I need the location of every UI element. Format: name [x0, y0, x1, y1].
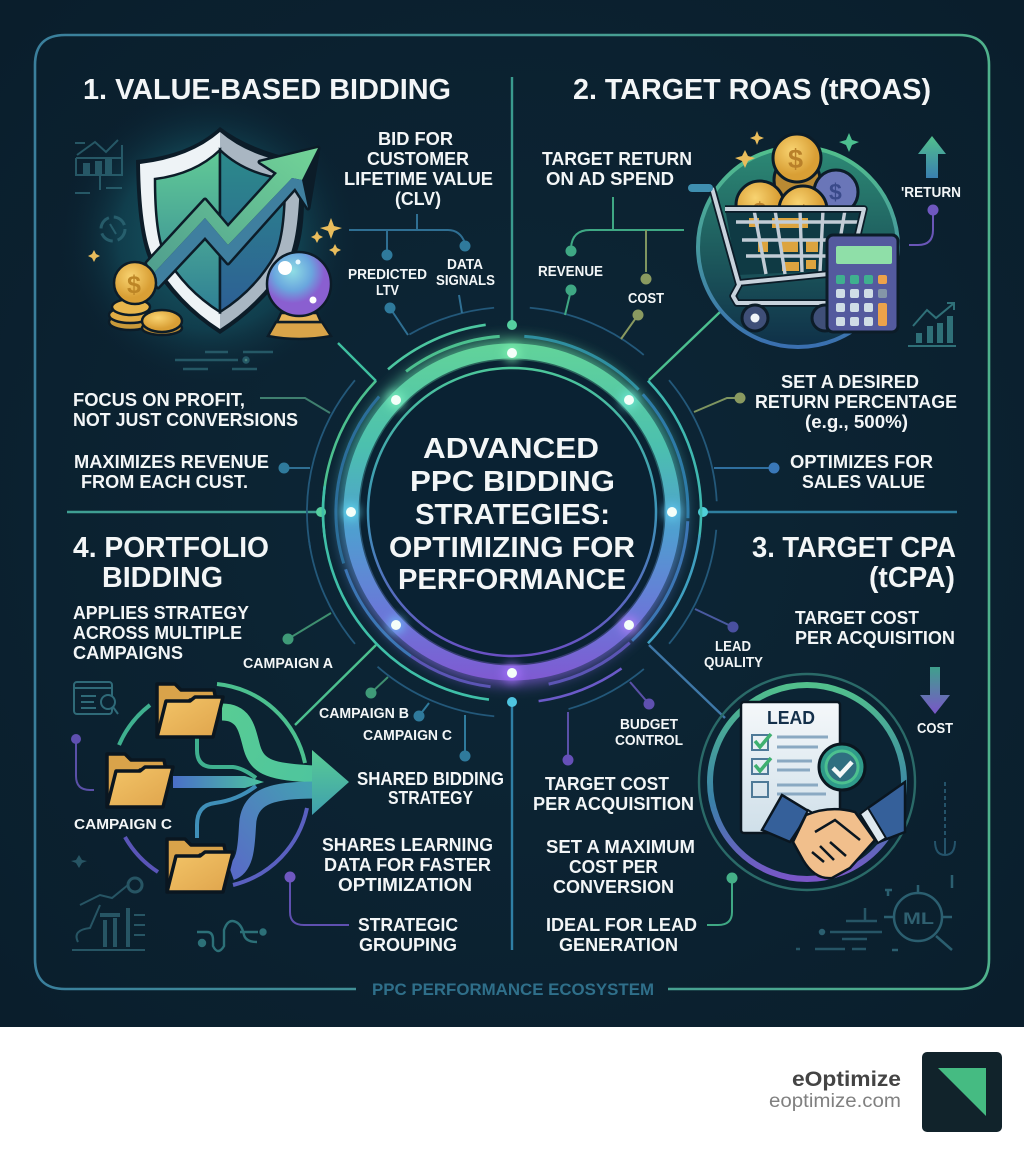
label: campaign C upper: CAMPAIGN C	[363, 728, 453, 744]
text: set a maximum cost	[546, 837, 695, 897]
heading 2: 2. TARGET ROAS (tROAS)	[573, 74, 931, 106]
icon: faint hook line	[935, 782, 955, 855]
heading 4	[73, 532, 269, 594]
label: predicted LTV	[348, 267, 427, 299]
connector: strategic grouping	[284, 872, 349, 925]
heading 1: 1. VALUE-BASED BIDDING	[83, 74, 451, 106]
central hub rings	[223, 223, 801, 801]
text: bid for customer lifetime value: (CLV)	[395, 189, 441, 209]
hub glow dots	[343, 345, 680, 682]
text: target return on ad spend: ON AD SPEND	[546, 169, 674, 189]
icon: lead form with handshake	[699, 674, 915, 890]
connector: lead quality	[695, 609, 738, 632]
icon: return arrow up	[918, 136, 946, 178]
icon: faint cycle	[101, 217, 125, 241]
icon: shield with rising arrow, coins and crystal ball	[58, 86, 362, 390]
central title: STRATEGIES:	[415, 499, 610, 531]
text: target return on ad spend	[542, 149, 692, 189]
text: ML: ML	[903, 909, 934, 928]
label: lead quality	[704, 639, 763, 671]
text: focus on profit: NOT JUST CONVERSIONS	[73, 410, 298, 430]
connector: campaign B	[366, 677, 429, 722]
connector: left divider	[67, 507, 326, 517]
label: predicted LTV: PREDICTED	[348, 267, 427, 283]
icon: shopping cart with coins and calculator	[688, 131, 898, 347]
connector: right divider	[698, 507, 957, 517]
connector: bottom divider	[507, 697, 517, 950]
text: target cost per acquisition center	[533, 774, 694, 814]
text: set a maximum cost: CONVERSION	[553, 877, 674, 897]
text: optimizes for sales value: OPTIMIZES FOR	[790, 452, 933, 472]
text: target cost per acquisition right: TARGET COST	[795, 608, 919, 628]
connector: left purple	[71, 734, 94, 790]
text: set a desired return percentage: (e.g., 500%)	[805, 412, 908, 432]
text: shared bidding strategy	[357, 769, 504, 808]
text: focus on profit: FOCUS ON PROFIT,	[73, 390, 245, 410]
text: shares learning data: OPTIMIZATION	[338, 875, 472, 895]
icon: shield with rising arrow, coins and crystal ball: $	[127, 271, 141, 299]
label: data signals: DATA	[447, 257, 483, 273]
connector: desired return	[694, 392, 746, 412]
text: strategic grouping: GROUPING	[359, 935, 457, 955]
icon: faint search window	[74, 682, 118, 714]
central title: OPTIMIZING FOR	[389, 532, 635, 564]
connector: return	[909, 204, 938, 245]
icon: faint growth chart	[908, 303, 956, 346]
label: predicted LTV: LTV	[376, 283, 399, 299]
icon: shopping cart with coins and calculator: $	[797, 201, 811, 228]
connector: budget control	[630, 682, 654, 710]
central title: PERFORMANCE	[398, 564, 626, 596]
icon: faint analytics cluster	[71, 855, 145, 950]
text: maximizes revenue: FROM EACH CUST.	[81, 472, 248, 492]
text: ideal for lead generation	[546, 915, 697, 955]
text: applies strategy	[73, 603, 249, 663]
text: ideal for lead generation: GENERATION	[559, 935, 678, 955]
connector: focus on profit	[260, 398, 330, 413]
text: shares learning data	[322, 835, 493, 895]
central title: ADVANCED	[423, 433, 599, 465]
label: campaign A: CAMPAIGN A	[243, 656, 334, 672]
text: set a desired return percentage: RETURN PERCENTAGE	[755, 392, 957, 412]
heading 3	[752, 532, 956, 594]
label: budget control: BUDGET	[620, 717, 678, 733]
text: set a desired return percentage: SET A DESIRED	[781, 372, 919, 392]
text: target return on ad spend: TARGET RETURN	[542, 149, 692, 169]
heading 3: (tCPA)	[869, 562, 955, 594]
text: applies strategy: APPLIES STRATEGY	[73, 603, 249, 623]
connector: maximizes revenue	[278, 462, 310, 474]
heading 4: BIDDING	[102, 562, 223, 594]
connector: top divider	[507, 77, 517, 330]
central title	[389, 433, 635, 596]
text: applies strategy: CAMPAIGNS	[73, 643, 183, 663]
text: strategic grouping	[358, 915, 458, 955]
label: cost: COST	[917, 721, 953, 737]
connector: corner lines from hub	[295, 312, 725, 725]
label: return: 'RETURN	[901, 185, 961, 201]
text: optimizes for sales value	[790, 452, 933, 492]
label: lead quality: QUALITY	[704, 655, 763, 671]
text: ideal for lead generation: IDEAL FOR LEAD	[546, 915, 697, 935]
text: target cost per acquisition right	[795, 608, 955, 648]
text: bid for customer lifetime value: CUSTOMER	[367, 149, 469, 169]
connector: sales value	[714, 462, 780, 474]
text: maximizes revenue: MAXIMIZES REVENUE	[74, 452, 269, 472]
footer caption: PPC PERFORMANCE ECOSYSTEM	[372, 981, 654, 999]
icon: faint signal wave	[197, 921, 266, 951]
connector: campaign C	[460, 715, 470, 762]
text: shared bidding strategy: SHARED BIDDING	[357, 769, 504, 789]
label: budget control	[615, 717, 683, 749]
text: shared bidding strategy: STRATEGY	[388, 788, 473, 808]
connector tree: ROAS	[565, 197, 684, 339]
label: data signals: SIGNALS	[436, 273, 495, 289]
icon: lead form with handshake: LEAD	[767, 708, 815, 728]
connector: cost per acquisition	[562, 712, 574, 766]
text: set a maximum cost: SET A MAXIMUM	[546, 837, 695, 857]
text: optimizes for sales value: SALES VALUE	[802, 472, 925, 492]
icon: faint ML magnifier	[796, 875, 952, 950]
label: cost: COST	[628, 291, 664, 307]
label: budget control: CONTROL	[615, 733, 683, 749]
text: maximizes revenue	[74, 452, 269, 492]
brand url: eoptimize.com	[769, 1091, 901, 1112]
text: shares learning data: SHARES LEARNING	[322, 835, 493, 855]
central title: PPC BIDDING	[410, 466, 615, 498]
brand name: eOptimize	[792, 1067, 901, 1091]
text: bid for customer lifetime value: BID FOR	[378, 129, 453, 149]
footer band	[0, 1027, 1024, 1154]
icon: shopping cart with coins and calculator: $	[788, 144, 803, 174]
text: applies strategy: ACROSS MULTIPLE	[73, 623, 242, 643]
icon: faint chart	[75, 140, 122, 193]
decorative data lines	[175, 352, 273, 369]
text: target cost per acquisition center: TARGET COST	[545, 774, 669, 794]
label: campaign B: CAMPAIGN B	[319, 706, 409, 722]
text: set a desired return percentage	[755, 372, 957, 432]
text: set a maximum cost: COST PER	[569, 857, 658, 877]
label: campaign C lower: CAMPAIGN C	[74, 817, 173, 833]
icon: shopping cart with coins and calculator: $	[829, 179, 842, 205]
icon: portfolio folders merging into arrow	[107, 684, 349, 892]
label: lead quality: LEAD	[715, 639, 751, 655]
label: data signals	[436, 257, 495, 289]
text: strategic grouping: STRATEGIC	[358, 915, 458, 935]
text: target cost per acquisition center: PER ACQUISITION	[533, 794, 694, 814]
label: revenue: REVENUE	[538, 264, 603, 280]
panel frame	[35, 35, 989, 989]
heading 3: 3. TARGET CPA	[752, 532, 956, 564]
text: target cost per acquisition right: PER ACQUISITION	[795, 628, 955, 648]
logo	[922, 1052, 1002, 1132]
icon: cost arrow down	[920, 667, 950, 714]
text: focus on profit	[73, 390, 298, 430]
text: bid for customer lifetime value: LIFETIME VALUE	[344, 169, 493, 189]
heading 4: 4. PORTFOLIO	[73, 532, 269, 564]
connector: lead generation	[707, 872, 738, 925]
text: shares learning data: DATA FOR FASTER	[324, 855, 491, 875]
icon: shopping cart with coins and calculator: $	[753, 198, 767, 225]
connector: campaign A	[282, 613, 331, 644]
connector tree: CLV	[349, 214, 470, 335]
text: bid for customer lifetime value	[344, 129, 493, 209]
